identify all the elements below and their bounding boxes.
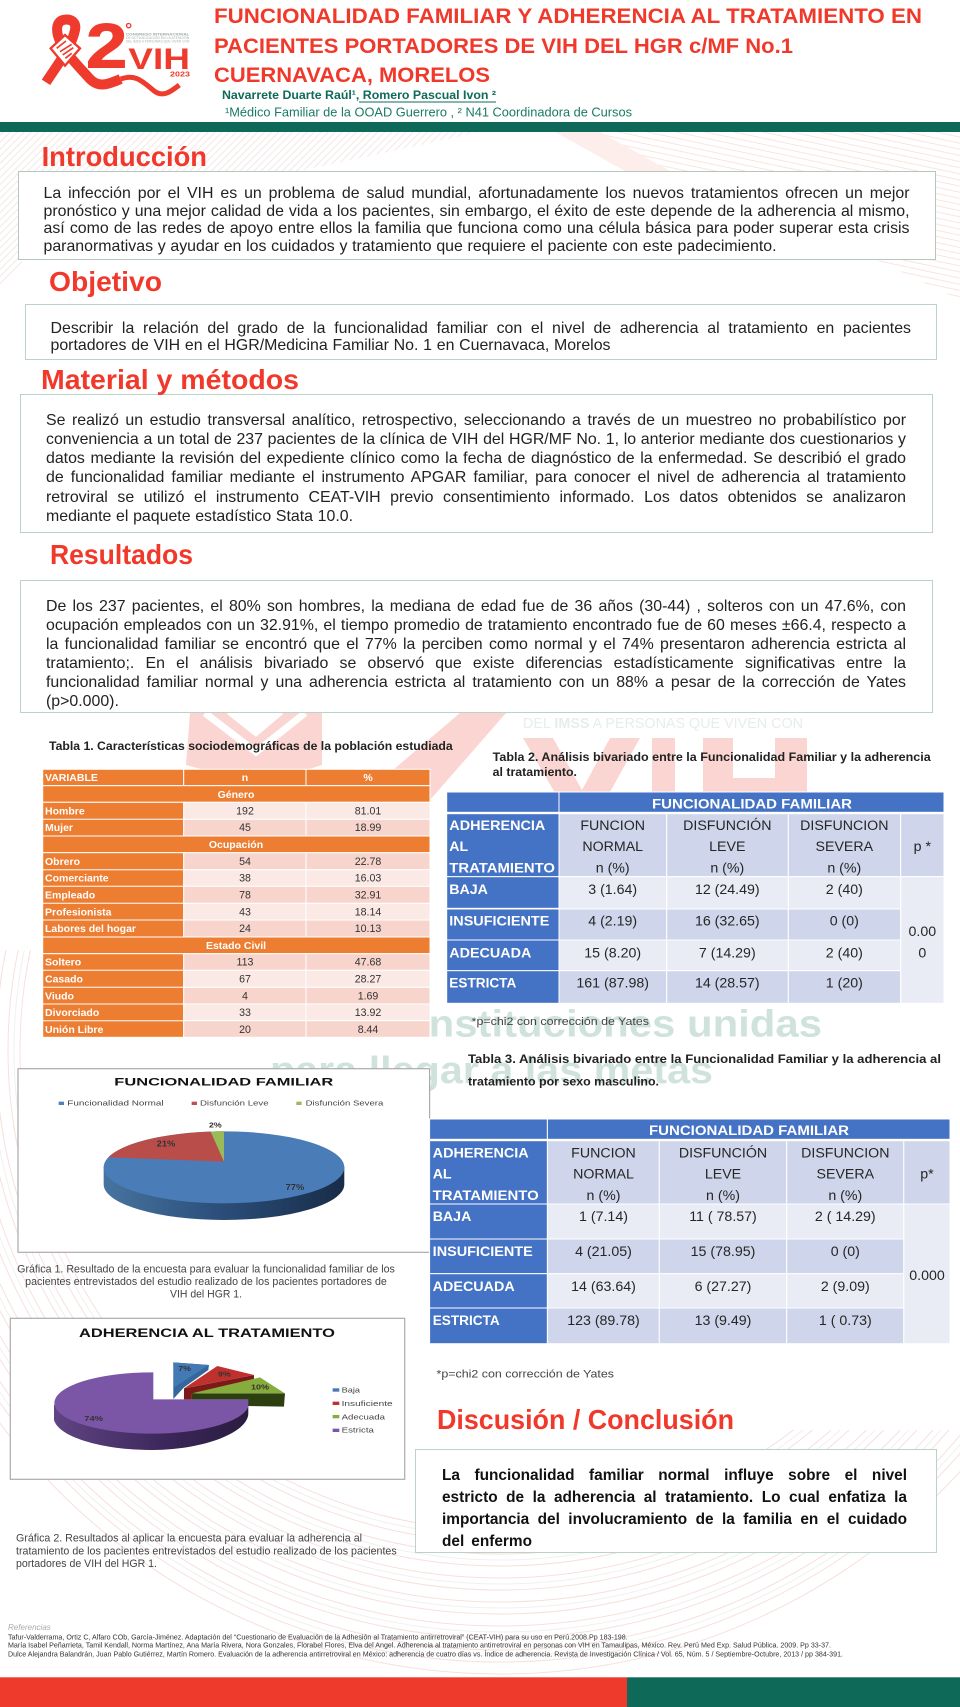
tabla 2: bivariado: 0 (0) (830, 914, 859, 930)
text: objetivo: portadores de VIH en el HGR/Medicina Familiar No. 1 en Cuernavaca, Morelos (50, 337, 610, 354)
logo: 2° Congreso VIH 2023: VIH (128, 43, 190, 76)
tabla 3: bivariado por sexo masculino: FUNCIONALIDAD FAMILIAR (649, 1123, 849, 1139)
tabla 1: características sociodemográficas: 18.99 (355, 822, 381, 834)
title: FUNCIONALIDAD FAMILIAR Y ADHERENCIA AL TRATAMIENTO EN (214, 5, 922, 28)
text: resultados: tratamiento;. En el análisis bivariado se observó que existe diferencias estadísticamente significativas entre la (46, 655, 906, 672)
tabla 3: bivariado por sexo masculino: 13 (9.49) (695, 1313, 751, 1329)
tabla 2: bivariado: LEVE (709, 839, 745, 855)
tabla 2: bivariado: 12 (24.49) (695, 882, 760, 898)
tabla 3: bivariado por sexo masculino: LEVE (705, 1166, 741, 1182)
legend (59, 1101, 383, 1108)
heading: introducción: Introducción (42, 141, 207, 172)
text: resultados: De los 237 pacientes, el 80% son hombres, la mediana de edad fue de 36 años (30-44) , solteros con un 47.6%, con (46, 598, 906, 615)
chart 1: funcionalidad familiar: FUNCIONALIDAD FAMILIAR (114, 1077, 333, 1089)
tabla 2: bivariado: NORMAL (582, 839, 643, 855)
logo: 2° Congreso VIH 2023: CONGRESO INTERNACIONAL (126, 33, 190, 37)
text: conclusión (442, 1467, 908, 1550)
tabla 2: bivariado: 2 (40) (826, 945, 863, 961)
legend: Disfunción Severa (306, 1101, 383, 1108)
referencias: Referencias (8, 1623, 51, 1632)
tabla 2 title (493, 752, 931, 779)
background pattern and watermark: instituciones unidas (417, 1004, 822, 1046)
tabla 3: bivariado por sexo masculino: 4 (21.05) (575, 1244, 632, 1260)
gráfica 2 caption: tratamiento de los pacientes entrevistados del estudio realizado de los pacientes (16, 1545, 397, 1557)
text: introducción: pronóstico y una mejor calidad de vida a los pacientes, sin embargo, el éxito de este depende de la adherencia al mismo, (44, 203, 910, 220)
gráfica 1 caption (17, 1263, 395, 1301)
tabla 2: bivariado: TRATAMIENTO (449, 860, 555, 876)
text: material y métodos: datos mediante la revisión del expediente clínico como la fecha de diagnóstico de la enfermedad. Se describió el grado (46, 450, 906, 467)
heading: resultados: Resultados (50, 539, 193, 570)
text: resultados: ocupación empleados con un 32.91%, el tiempo promedio de tratamiento encontrado fue de 60 meses ±66.4, respecto a (46, 617, 906, 634)
heading: discusión / conclusión: Discusión / Conclusión (437, 1404, 734, 1435)
panel: objetivo (25, 304, 937, 360)
tabla 3: bivariado por sexo masculino: 0 (0) (831, 1244, 860, 1260)
text: conclusión: La funcionalidad familiar normal influye sobre el nivel (442, 1467, 907, 1484)
tabla 3: bivariado por sexo masculino: 1 (7.14) (579, 1209, 628, 1225)
tabla 3: bivariado por sexo masculino: 2 (9.09) (821, 1279, 870, 1295)
tabla 2: bivariado: 161 (87.98) (576, 976, 649, 992)
chart 2: adherencia al tratamiento: 10% (251, 1382, 269, 1391)
tabla 1: características sociodemográficas: 28.27 (355, 974, 381, 986)
text: resultados: (p>0.000). (46, 693, 119, 710)
panel: introducción (18, 171, 936, 260)
tabla 3: bivariado por sexo masculino: n (%) (587, 1188, 620, 1204)
footer bar (0, 1677, 960, 1707)
tabla 2 title: Tabla 2. Análisis bivariado entre la Funcionalidad Familiar y la adherencia (493, 752, 931, 764)
gráfica 1 caption: pacientes entrevistados del estudio realizado de los pacientes portadores de (25, 1276, 387, 1288)
tabla 1: características sociodemográficas: Hombre (45, 806, 85, 818)
tabla 2: bivariado: 2 (40) (826, 882, 863, 898)
text: introducción: paranormativas y ayudar en los cuidados y tratamiento que requiere el paciente con este padecimiento. (44, 238, 776, 255)
tabla 1: características sociodemográficas: % (363, 772, 373, 784)
tabla 1: características sociodemográficas: 1.69 (358, 990, 378, 1002)
tabla 1: características sociodemográficas: 38 (239, 873, 251, 885)
referencias: Tafur-Valderrama, Ortiz C, Alfaro COb, García-Jiménez. Adaptación del “Cuestionario de Evaluación de la Adhesión al Tratamiento antirretroviral” (CEAT-VIH) para su uso en Perú.2008.Pp 183-198. (8, 1634, 628, 1641)
legend: Estricta (342, 1426, 375, 1435)
tabla 3: bivariado por sexo masculino: ESTRICTA (433, 1313, 500, 1329)
tabla 2: bivariado: AL (449, 839, 469, 855)
tabla 2: bivariado: 1 (20) (826, 976, 863, 992)
tabla 1 title: Tabla 1. Características sociodemográficas de la población estudiada (49, 741, 453, 753)
tabla 3 title (468, 1054, 941, 1089)
referencias: Dulce Alejandra Balandrán, Juan Pablo Gutiérrez, Martín Romero. Evaluación de la adherencia antirretroviral en México: adherencia de cuatro días vs. Índice de adherencia. Revista de Investigación Clínica / Vol. 65, Núm. 5 / Septiembre-Octubre, 2013 / pp 384-391. (8, 1649, 843, 1658)
icon: red ribbon (46, 20, 179, 94)
tabla 1: características sociodemográficas: Ocupación (209, 839, 263, 851)
tabla 3: bivariado por sexo masculino: INSUFICIENTE (433, 1244, 533, 1260)
tabla 2 footnote: *p=chi2 con corrección de Yates (472, 1016, 650, 1028)
text: material y métodos: de funcionalidad familiar mediante el instrumento APGAR familiar, para conocer el nivel de adherencia al tratamiento (46, 469, 906, 486)
tabla 2: bivariado: BAJA (449, 882, 488, 898)
tabla 2: bivariado: 4 (2.19) (588, 914, 637, 930)
chart 2: adherencia al tratamiento (10, 1318, 405, 1479)
text: resultados: la funcionalidad familiar se encontró que el 77% la perciben como normal y el 74% presentaron adherencia estricta al (46, 636, 906, 653)
title (214, 5, 922, 87)
text: material y métodos: conveniencia a un total de 237 pacientes de la clínica de VIH del HGR/MF No. 1, lo anterior mediante dos cuestionarios y (46, 431, 906, 448)
icon: handshake (51, 35, 80, 66)
legend: Insuficiente (342, 1399, 393, 1408)
gráfica 1 caption: VIH del HGR 1. (170, 1289, 242, 1301)
logo: 2° Congreso VIH 2023 (46, 12, 190, 94)
tabla 1: características sociodemográficas: Unión Libre (45, 1024, 103, 1036)
header green bar (0, 122, 960, 132)
legend: Funcionalidad Normal (67, 1101, 164, 1108)
tabla 1: características sociodemográficas: Obrero (45, 856, 80, 868)
tabla 3: bivariado por sexo masculino: 0.000 (909, 1268, 945, 1284)
tabla 3 title: tratamiento por sexo masculino. (468, 1077, 659, 1089)
tabla 1: características sociodemográficas: Divorciado (45, 1007, 99, 1019)
text: conclusión: importancia del involucramiento de la familia en el cuidado (442, 1511, 907, 1528)
referencias (8, 1623, 843, 1658)
referencias: María Isabel Peñarrieta, Tamil Kendall, Norma Martínez, Ana María Rivera, Nora Gonzales, Florabel Flores, Elva del Angel. Adherencia al tratamiento antirretroviral en personas con VIH en Tamaulipas, México. Rev. Perú Med Exp. Salud Pública. 2009. Pp 33-37. (8, 1642, 831, 1649)
legend (333, 1385, 393, 1435)
text: material y métodos: retroviral se utilizó el instrumento CEAT-VIH previo consentimiento informado. Los datos obtenidos se analizaron (46, 489, 906, 506)
tabla 3: bivariado por sexo masculino: 14 (63.64) (571, 1279, 636, 1295)
tabla 2: bivariado (447, 792, 944, 1003)
text: introducción: La infección por el VIH es un problema de salud mundial, afortunadamente los nuevos tratamientos ofrecen un mejor (44, 185, 910, 202)
panel: material y métodos (20, 394, 933, 533)
tabla 1: características sociodemográficas: 32.91 (355, 890, 381, 902)
background pattern and watermark: DEL IMSS A PERSONAS QUE VIVEN CON (523, 716, 803, 732)
tabla 2: bivariado: 0 (918, 945, 926, 961)
tabla 2: bivariado: SEVERA (816, 839, 874, 855)
tabla 3: bivariado por sexo masculino: ADHERENCIA (433, 1145, 529, 1161)
tabla 3: bivariado por sexo masculino: 6 (27.27) (695, 1279, 751, 1295)
text: material y métodos: mediante el paquete estadístico Stata 10.0. (46, 508, 353, 525)
tabla 1: características sociodemográficas: 16.03 (355, 873, 381, 885)
tabla 3: bivariado por sexo masculino: 11 ( 78.57) (689, 1209, 757, 1225)
tabla 1: características sociodemográficas: Viudo (45, 990, 74, 1002)
tabla 1: características sociodemográficas: 113 (237, 957, 254, 969)
text: material y métodos: Se realizó un estudio transversal analítico, retrospectivo, seleccionando a través de un muestreo no probabilístico por (46, 412, 906, 429)
chart 2: adherencia al tratamiento: 74% (84, 1414, 103, 1423)
affiliations: ¹Médico Familiar de la OOAD Guerrero , ² N41 Coordinadora de Cursos (225, 106, 632, 120)
tabla 2: bivariado: 0.00 (908, 924, 936, 940)
tabla 1: características sociodemográficas: 54 (239, 856, 251, 868)
tabla 1: características sociodemográficas: 45 (239, 822, 251, 834)
heading: objetivo: Objetivo (49, 266, 162, 297)
chart 1: funcionalidad familiar (18, 1069, 430, 1252)
tabla 1: características sociodemográficas: 47.68 (355, 957, 381, 969)
tabla 2: bivariado: INSUFICIENTE (449, 914, 549, 930)
tabla 1: características sociodemográficas: 78 (239, 890, 251, 902)
tabla 3: bivariado por sexo masculino: n (%) (828, 1188, 862, 1204)
tabla 3: bivariado por sexo masculino: FUNCION (571, 1145, 636, 1161)
tabla 2: bivariado: n (%) (710, 860, 744, 876)
text: resultados (46, 598, 906, 710)
text: resultados: funcionalidad familiar normal y una adherencia estricta al tratamiento con un 88% a pesar de la corrección de Yates (46, 674, 906, 691)
logo: 2° Congreso VIH 2023: 2023 (170, 70, 190, 79)
pie slices (54, 1399, 248, 1450)
tabla 3: bivariado por sexo masculino: 15 (78.95) (691, 1244, 755, 1260)
legend: Adecuada (342, 1412, 386, 1421)
gráfica 2 caption (16, 1533, 397, 1570)
tabla 3: bivariado por sexo masculino: NORMAL (573, 1166, 634, 1182)
tabla 1: características sociodemográficas (43, 769, 430, 1037)
tabla 1: características sociodemográficas: Estado Civil (206, 940, 266, 952)
tabla 2: bivariado: FUNCIONALIDAD FAMILIAR (652, 796, 852, 812)
chart 2: adherencia al tratamiento: 9% (218, 1369, 231, 1378)
tabla 3: bivariado por sexo masculino: 2 ( 14.29) (815, 1209, 876, 1225)
logo: 2° Congreso VIH 2023: DE ACTUALIZACIÓN EN LA ATENCIÓN (126, 35, 190, 40)
tabla 3: bivariado por sexo masculino: n (%) (706, 1188, 740, 1204)
tabla 3: bivariado por sexo masculino: p* (920, 1166, 934, 1182)
tabla 3: bivariado por sexo masculino: BAJA (433, 1209, 471, 1225)
legend: Baja (342, 1385, 361, 1394)
tabla 2 title: al tratamiento. (493, 767, 577, 779)
tabla 2: bivariado: DISFUNCION (800, 818, 888, 834)
authors: Navarrete Duarte Raúl¹, Romero Pascual Ivon ² (222, 88, 496, 102)
tabla 2: bivariado: ADHERENCIA (449, 818, 545, 834)
tabla 1: características sociodemográficas: 81.01 (355, 806, 381, 818)
chart 1: funcionalidad familiar: 2% (209, 1121, 222, 1130)
tabla 1: características sociodemográficas: 67 (239, 974, 251, 986)
gráfica 2 caption: Gráfica 2. Resultados al aplicar la encuesta para evaluar la adherencia al (16, 1533, 362, 1545)
tabla 1: características sociodemográficas: Comerciante (45, 873, 109, 885)
tabla 1: características sociodemográficas: Empleado (45, 890, 95, 902)
legend: Disfunción Leve (200, 1101, 269, 1108)
tabla 3: bivariado por sexo masculino: AL (433, 1166, 452, 1182)
tabla 3: bivariado por sexo masculino (430, 1119, 950, 1344)
tabla 2: bivariado: n (%) (827, 860, 861, 876)
chart 2: adherencia al tratamiento: ADHERENCIA AL TRATAMIENTO (79, 1326, 335, 1340)
tabla 1: características sociodemográficas: Mujer (45, 822, 73, 834)
tabla 1: características sociodemográficas: Casado (45, 974, 83, 986)
gráfica 2 caption: portadores de VIH del HGR 1. (16, 1558, 157, 1570)
tabla 3: bivariado por sexo masculino: TRATAMIENTO (433, 1188, 539, 1204)
tabla 1: características sociodemográficas: 10.13 (355, 923, 381, 935)
tabla 1: características sociodemográficas: 8.44 (358, 1024, 378, 1036)
text: introducción: así como de las redes de apoyo entre ellos la familia que funciona como una célula básica para poder superar esta crisis (44, 220, 910, 237)
tabla 1: características sociodemográficas: n (242, 772, 248, 784)
tabla 3: bivariado por sexo masculino: 123 (89.78) (567, 1313, 640, 1329)
tabla 3: bivariado por sexo masculino: ADECUADA (433, 1279, 515, 1295)
text: conclusión: del enfermo (442, 1533, 532, 1550)
tabla 3: bivariado por sexo masculino: DISFUNCIÓN (679, 1144, 767, 1161)
tabla 3 footnote: *p=chi2 con corrección de Yates (436, 1369, 615, 1381)
tabla 2: bivariado: 14 (28.57) (695, 976, 760, 992)
tabla 2: bivariado: 16 (32.65) (695, 914, 760, 930)
text: objetivo (50, 320, 911, 354)
text: introducción (44, 185, 910, 255)
tabla 1: características sociodemográficas: 192 (236, 806, 254, 818)
logo: 2° Congreso VIH 2023: 2 (86, 12, 127, 82)
tabla 2: bivariado: 3 (1.64) (588, 882, 637, 898)
tabla 2: bivariado: 7 (14.29) (699, 945, 756, 961)
text: objetivo: Describir la relación del grado de la funcionalidad familiar con el nivel de adherencia al tratamiento en pacientes (50, 320, 911, 337)
logo: 2° Congreso VIH 2023: DEL IMSS A PERSONAS QUE VIVEN CON (126, 40, 190, 44)
tabla 1: características sociodemográficas: 20 (239, 1024, 251, 1036)
chart 1: funcionalidad familiar: 21% (157, 1140, 175, 1149)
tabla 1: características sociodemográficas: 4 (242, 990, 248, 1002)
tabla 2: bivariado: p * (914, 839, 931, 855)
text: material y métodos (46, 412, 906, 525)
text: conclusión: estricto de la adherencia al tratamiento. Lo cual enfatiza la (442, 1489, 907, 1506)
tabla 1: características sociodemográficas: Labores del hogar (45, 923, 136, 935)
panel: resultados (20, 580, 933, 713)
tabla 1: características sociodemográficas: 13.92 (355, 1007, 381, 1019)
tabla 2: bivariado: ADECUADA (449, 945, 531, 961)
gráfica 1 caption: Gráfica 1. Resultado de la encuesta para evaluar la funcionalidad familiar de los (17, 1263, 395, 1275)
tabla 1: características sociodemográficas: 18.14 (355, 906, 381, 918)
tabla 1: características sociodemográficas: VARIABLE (45, 772, 98, 784)
tabla 3: bivariado por sexo masculino: SEVERA (817, 1166, 875, 1182)
tabla 1: características sociodemográficas: Soltero (45, 957, 81, 969)
tabla 1: características sociodemográficas: 33 (239, 1007, 251, 1019)
tabla 2: bivariado: ESTRICTA (449, 976, 516, 992)
background pattern and watermark: para llegar a las metas (270, 1050, 713, 1092)
panel: discusión (415, 1449, 937, 1553)
tabla 2: bivariado: 15 (8.20) (584, 945, 641, 961)
chart 1: funcionalidad familiar: 77% (286, 1183, 304, 1192)
tabla 2: bivariado: FUNCION (580, 818, 645, 834)
tabla 3 title: Tabla 3. Análisis bivariado entre la Funcionalidad Familiar y la adherencia al (468, 1054, 941, 1066)
tabla 2: bivariado: n (%) (596, 860, 630, 876)
title: PACIENTES PORTADORES DE VIH DEL HGR c/MF No.1 (214, 35, 793, 58)
tabla 3: bivariado por sexo masculino: 1 ( 0.73) (819, 1313, 872, 1329)
title: CUERNAVACA, MORELOS (214, 64, 490, 87)
chart 2: adherencia al tratamiento: 7% (178, 1364, 191, 1373)
tabla 1: características sociodemográficas: Profesionista (45, 906, 112, 918)
heading: material y métodos: Material y métodos (41, 364, 299, 395)
tabla 1: características sociodemográficas: 24 (239, 923, 251, 935)
tabla 1: características sociodemográficas: Género (218, 789, 254, 801)
tabla 2: bivariado: DISFUNCIÓN (683, 817, 771, 834)
tabla 1: características sociodemográficas: 22.78 (355, 856, 381, 868)
tabla 1: características sociodemográficas: 43 (239, 906, 251, 918)
tabla 3: bivariado por sexo masculino: DISFUNCION (801, 1145, 889, 1161)
